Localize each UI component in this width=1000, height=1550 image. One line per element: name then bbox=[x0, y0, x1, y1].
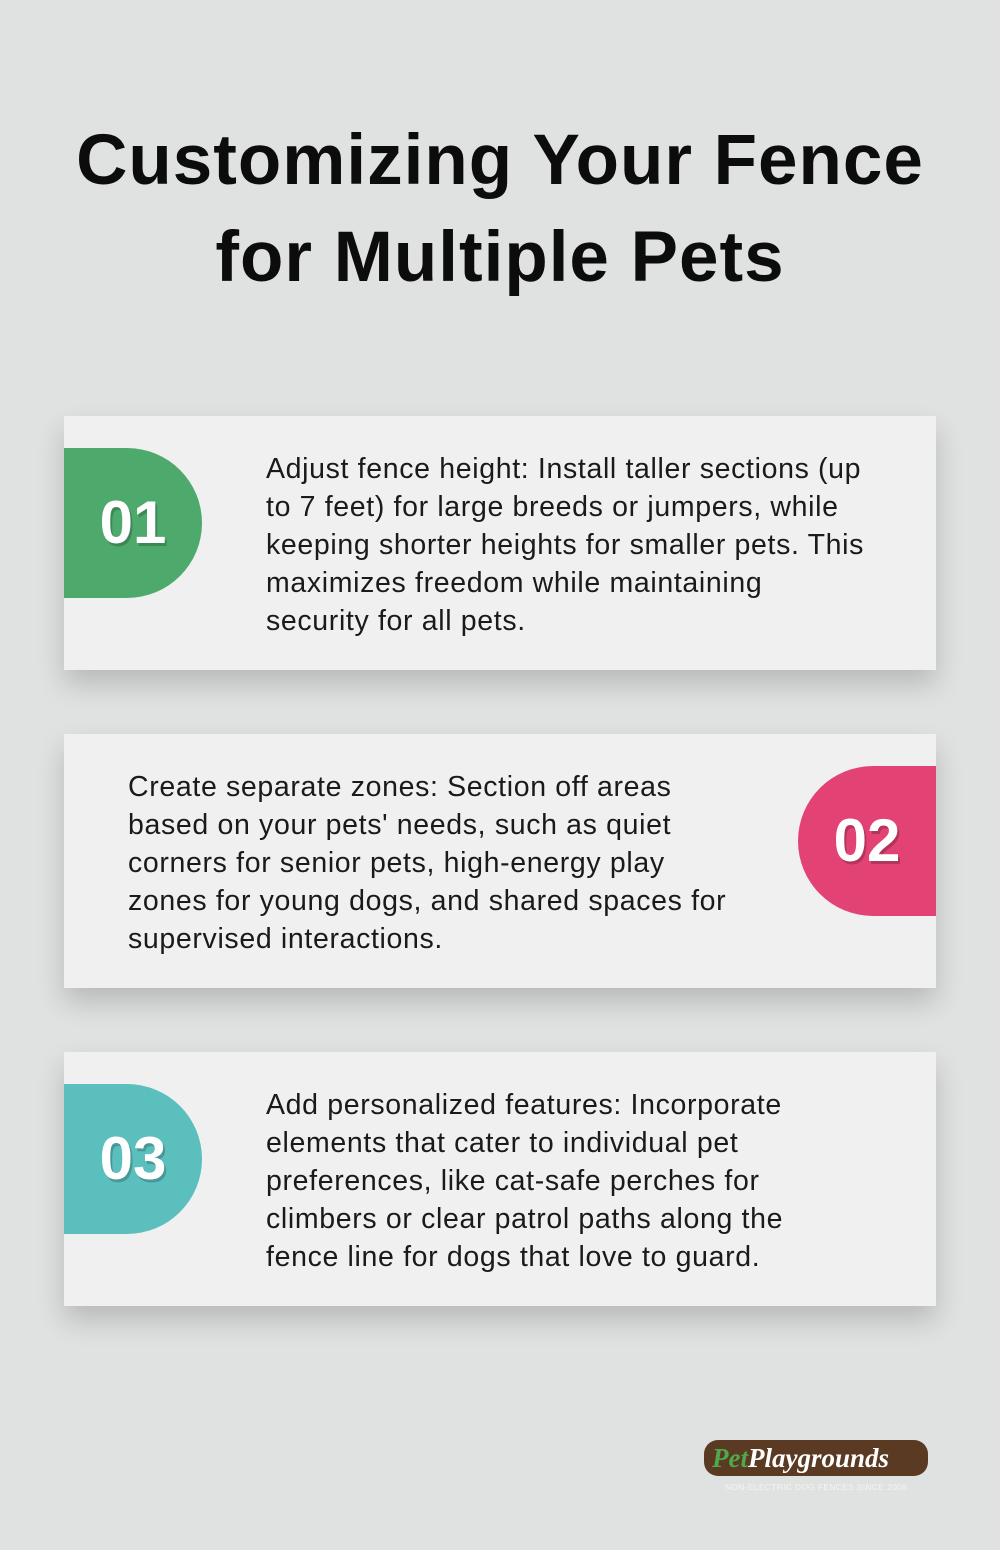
text 01 bbox=[266, 453, 864, 637]
text 02 bbox=[128, 771, 726, 955]
text 03 bbox=[266, 1089, 783, 1273]
logo bbox=[704, 1440, 928, 1492]
panel: step 01 bbox=[64, 416, 936, 670]
logo: PetPlaygrounds bbox=[712, 1443, 889, 1473]
badge 02 bbox=[798, 766, 936, 916]
badge 01: 01 bbox=[100, 489, 166, 556]
text 01: Adjust fence height: Install taller sections (up bbox=[266, 453, 861, 485]
text 01: maximizes freedom while maintaining bbox=[266, 567, 762, 599]
badge 03 bbox=[64, 1084, 202, 1234]
text 03: preferences, like cat-safe perches for bbox=[266, 1165, 760, 1197]
panel: step 03 bbox=[64, 1052, 936, 1306]
badge 03: 03 bbox=[100, 1125, 166, 1192]
title: for Multiple Pets bbox=[215, 218, 785, 297]
title: Customizing Your Fence bbox=[76, 121, 924, 200]
text 02: corners for senior pets, high-energy play bbox=[128, 847, 665, 879]
badge 01 bbox=[64, 448, 202, 598]
text 03: climbers or clear patrol paths along the bbox=[266, 1203, 783, 1235]
text 02: supervised interactions. bbox=[128, 923, 443, 955]
text 02: based on your pets' needs, such as quiet bbox=[128, 809, 671, 841]
logo: NON-ELECTRIC DOG FENCES SINCE 2008 bbox=[725, 1482, 907, 1492]
text 01: security for all pets. bbox=[266, 605, 526, 637]
text 03: Add personalized features: Incorporate bbox=[266, 1089, 782, 1121]
text 02: Create separate zones: Section off areas bbox=[128, 771, 672, 803]
text 03: elements that cater to individual pet bbox=[266, 1127, 738, 1159]
badge 02: 02 bbox=[834, 807, 900, 874]
text 01: to 7 feet) for large breeds or jumpers, while bbox=[266, 491, 839, 523]
text 02: zones for young dogs, and shared spaces for bbox=[128, 885, 726, 917]
panel: step 02 bbox=[64, 734, 936, 988]
title bbox=[76, 121, 924, 297]
text 03: fence line for dogs that love to guard. bbox=[266, 1241, 760, 1273]
text 01: keeping shorter heights for smaller pets. This bbox=[266, 529, 864, 561]
